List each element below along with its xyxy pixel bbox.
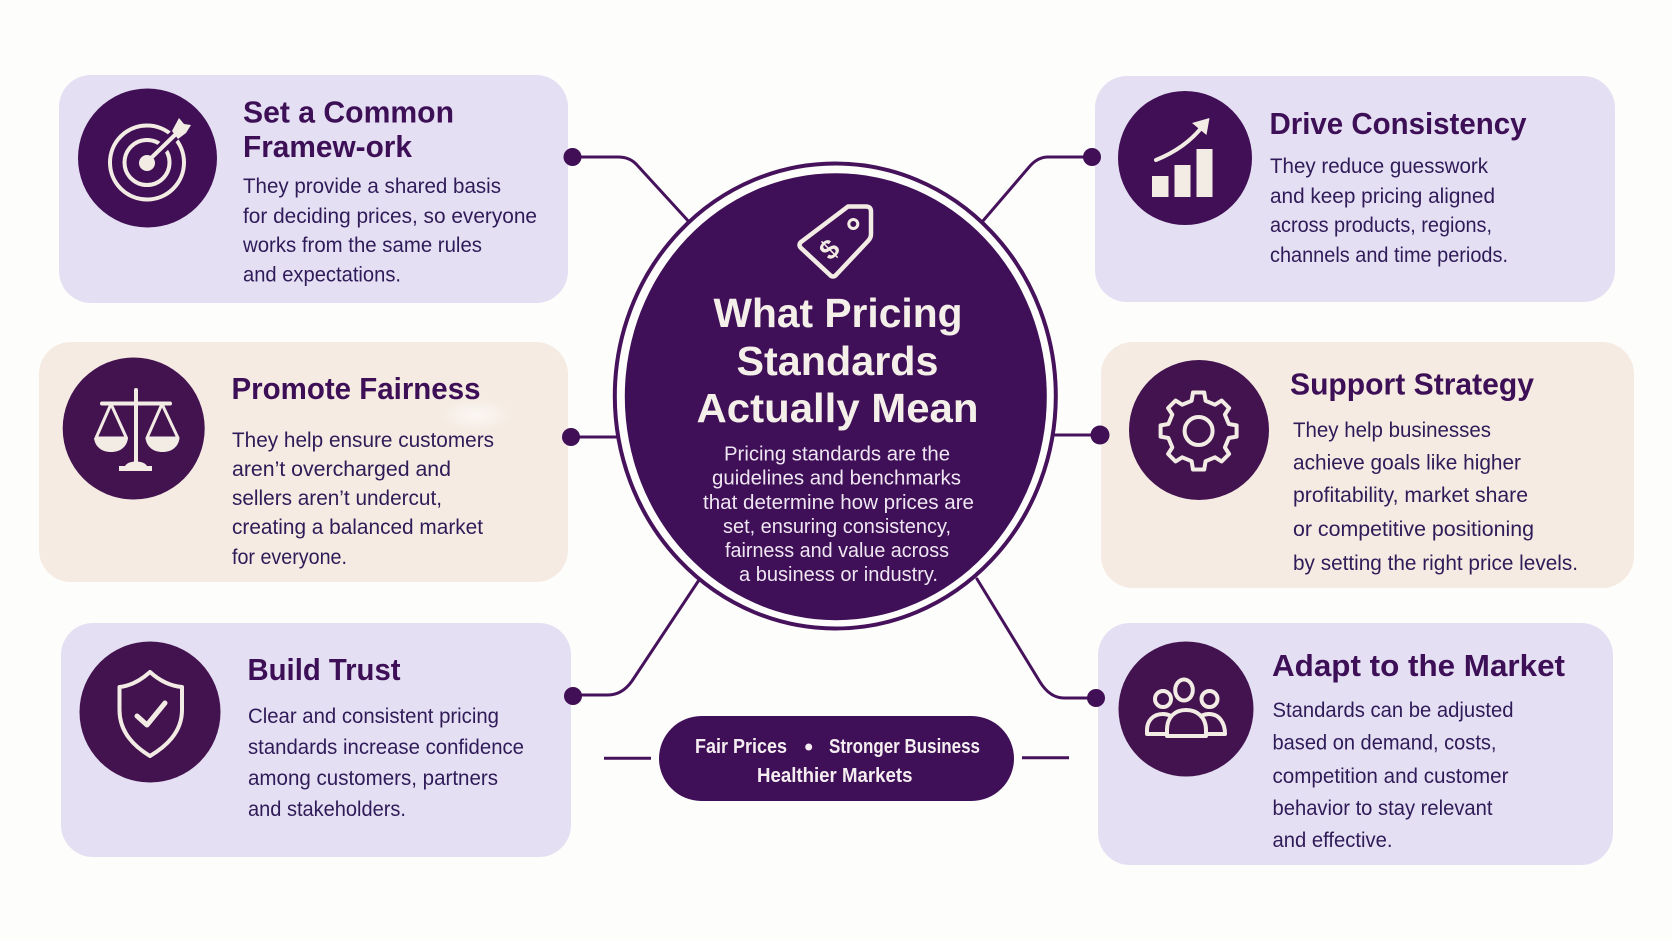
text block: framework description: works from the same rules xyxy=(242,234,482,257)
text block: trust description: and stakeholders. xyxy=(248,798,406,821)
text block: definition: guidelines and benchmarks xyxy=(712,468,961,490)
connector: middle right xyxy=(1055,426,1110,444)
text block: fairness description: aren’t overcharged and xyxy=(232,458,451,481)
central circle: What Pricing Standards Actually Mean xyxy=(615,164,1056,628)
text block: definition: that determine how prices are xyxy=(703,492,974,514)
text block: consistency description: across products, regions, xyxy=(1270,214,1492,237)
text block: consistency description xyxy=(1270,155,1508,267)
connector: middle left xyxy=(562,428,618,446)
heading: Build Trust: Build Trust xyxy=(248,652,400,687)
text block: definition: fairness and value across xyxy=(725,540,949,562)
text block: consistency description: channels and time periods. xyxy=(1270,244,1508,267)
pill: key outcomes: Healthier Markets xyxy=(757,765,912,787)
heading: Support Strategy: Support Strategy xyxy=(1290,366,1535,402)
pill: key outcomes: Fair Prices xyxy=(695,736,787,758)
text block: definition: a business or industry. xyxy=(739,564,938,586)
text block: fairness description xyxy=(232,429,494,569)
icon: rising bar chart xyxy=(1118,91,1252,225)
text block: consistency description: They reduce guesswork xyxy=(1270,155,1488,178)
title: Actually Mean xyxy=(696,385,978,431)
connector: top right xyxy=(982,148,1101,222)
text block: definition: set, ensuring consistency, xyxy=(723,516,951,538)
panel: Build Trust xyxy=(61,623,571,857)
text block: strategy description: or competitive positioning xyxy=(1293,518,1534,541)
heading: Drive Consistency: Drive Consistency xyxy=(1270,106,1527,141)
panel: Drive Consistency xyxy=(1095,76,1615,302)
panel: Set a Common Framework xyxy=(59,75,568,303)
title: Standards xyxy=(736,338,938,384)
pill: key outcomes: Stronger Business xyxy=(829,736,980,758)
text block: strategy description: by setting the right price levels. xyxy=(1293,552,1578,575)
icon: target with arrow xyxy=(78,88,217,228)
panel: Support Strategy xyxy=(1101,342,1634,588)
icon: balance scales xyxy=(63,358,205,500)
panel: Promote Fairness xyxy=(39,342,568,582)
icon: group of people xyxy=(1118,642,1254,776)
text block: framework description: and expectations. xyxy=(243,264,401,286)
text block: market description: and effective. xyxy=(1272,829,1392,852)
text block: fairness description: sellers aren’t undercut, xyxy=(232,487,442,510)
heading: Promote Fairness: Promote Fairness xyxy=(232,371,480,406)
text block: framework description: They provide a shared basis xyxy=(243,175,501,198)
connector: top left xyxy=(564,148,691,224)
text block: framework description xyxy=(242,175,537,286)
text block: consistency description: and keep pricing aligned xyxy=(1270,185,1495,208)
text block: trust description: standards increase confidence xyxy=(248,736,524,759)
heading: Set a Common Framew-ork: Framew-ork xyxy=(243,129,413,164)
icon: price tag xyxy=(800,206,871,276)
text block: fairness description: creating a balanced market xyxy=(232,516,483,539)
connector: bottom left xyxy=(564,580,699,705)
text block: fairness description: They help ensure customers xyxy=(232,429,494,452)
text block: market description: competition and customer xyxy=(1272,765,1508,788)
heading: Set a Common Framew-ork: Set a Common xyxy=(243,94,454,130)
heading: Set a Common Framew-ork xyxy=(243,94,454,164)
text block: market description: behavior to stay relevant xyxy=(1272,797,1493,820)
text block: trust description: among customers, partners xyxy=(248,767,498,790)
text block: market description xyxy=(1272,699,1514,852)
pill: key outcomes xyxy=(659,716,1014,801)
text block: definition: Pricing standards are the xyxy=(724,444,950,466)
icon: price tag: $ xyxy=(813,233,846,266)
text block: strategy description xyxy=(1293,419,1578,575)
icon: shield with check xyxy=(80,642,220,782)
text block: strategy description: profitability, market share xyxy=(1293,484,1528,507)
icon: gear xyxy=(1129,360,1269,500)
text block: fairness description: for everyone. xyxy=(232,546,347,569)
connector: bottom right xyxy=(977,579,1105,707)
text block: strategy description: They help businesses xyxy=(1293,419,1491,442)
panel: Adapt to the Market xyxy=(1098,623,1613,865)
text block: framework description: for deciding prices, so everyone xyxy=(243,205,537,228)
title xyxy=(696,290,978,431)
title: What Pricing xyxy=(714,290,962,336)
text block: strategy description: achieve goals like higher xyxy=(1293,452,1521,474)
text block: definition xyxy=(703,444,974,586)
text block: trust description xyxy=(248,705,524,821)
text block: market description: Standards can be adjusted xyxy=(1272,699,1514,722)
text block: trust description: Clear and consistent pricing xyxy=(248,705,499,728)
heading: Adapt to the Market: Adapt to the Market xyxy=(1272,648,1565,683)
text block: market description: based on demand, costs, xyxy=(1272,732,1496,754)
